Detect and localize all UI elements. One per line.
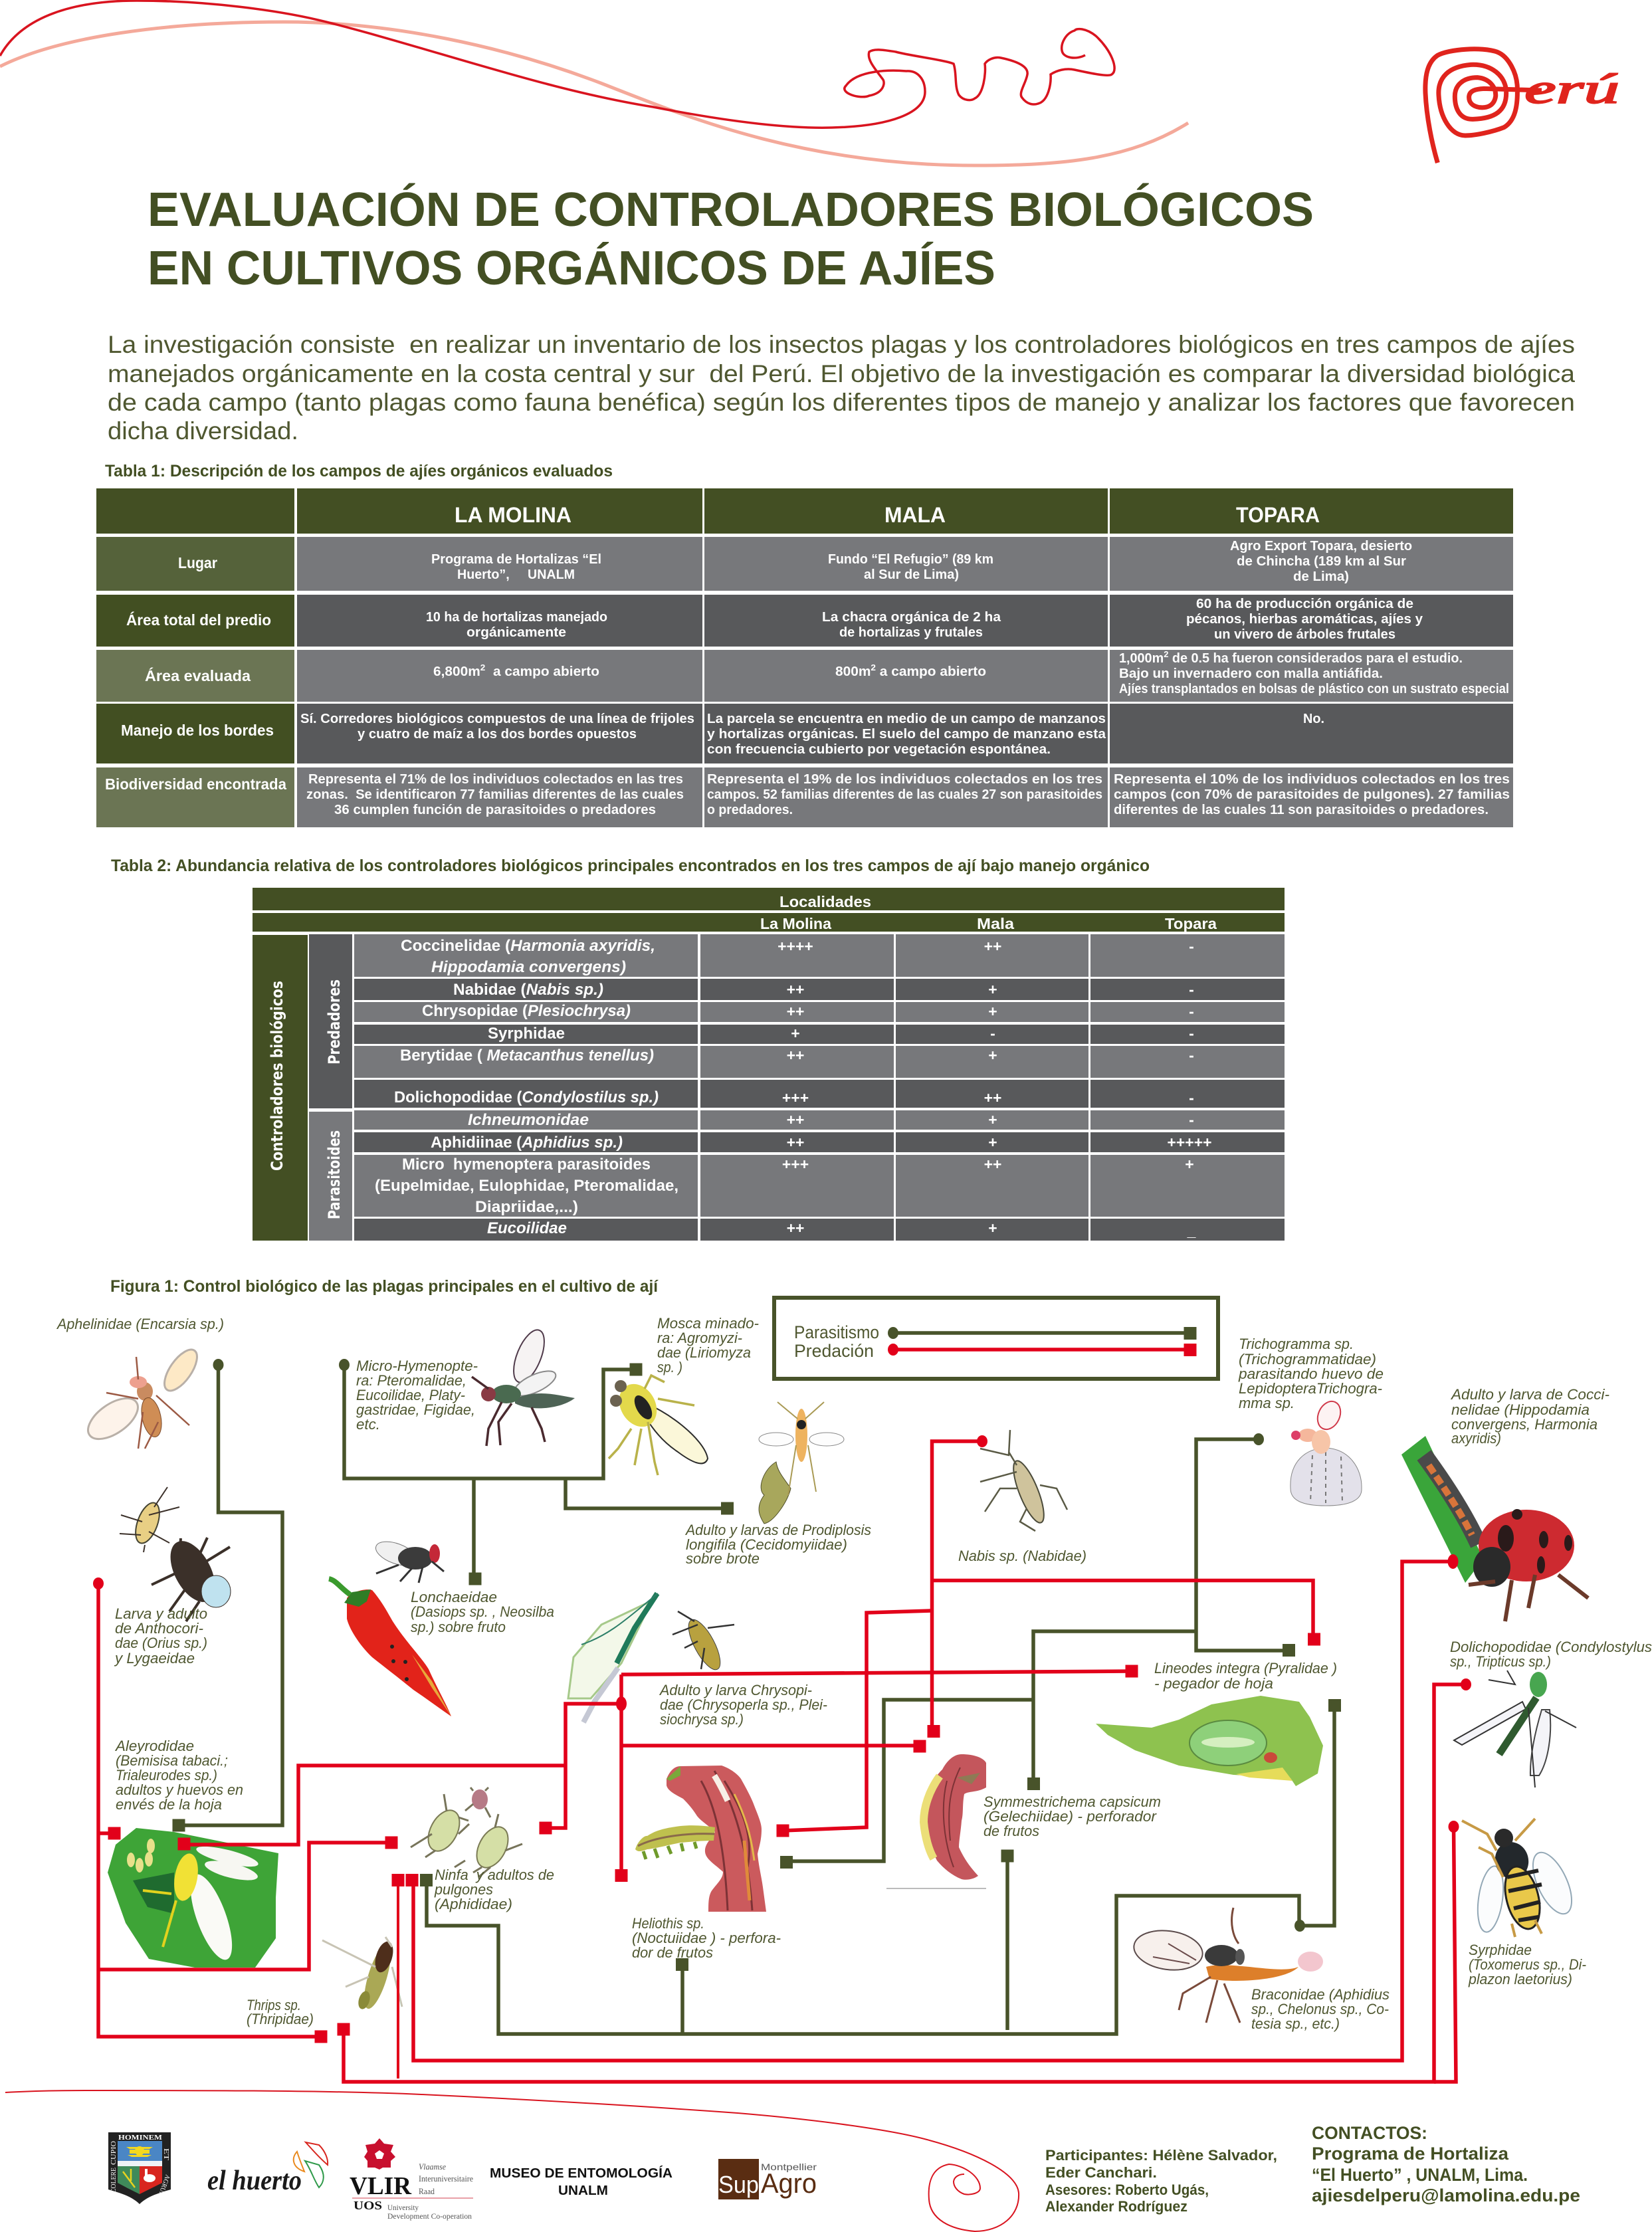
label: Trichogramma: [1238, 1336, 1384, 1411]
text: participantes: Eder Canchari.: [1045, 2164, 1157, 2181]
label: Lineodes: [1154, 1660, 1337, 1692]
side label: Predadores: [309, 934, 352, 1108]
table 1 row: Biodiversidad encontrada: Representa el 71% de los individuos colectados en las tres: [308, 772, 683, 787]
label: Aleyrodidae: Trialeurodes sp.): [116, 1767, 217, 1783]
icon: Symmestrichema fruit: [886, 1754, 986, 1888]
table 1 row: Area total: orgánicamente: [466, 625, 566, 640]
table 1 row: Area evaluada: 2: [480, 662, 485, 672]
text: participantes: Asesores: Roberto Ugás,: [1045, 2181, 1209, 2198]
table 1 row: Biodiversidad encontrada: Representa el 19% de los individuos colectados en los tres: [707, 772, 1102, 787]
table 2 taxon names: Syrphidae: [488, 1025, 565, 1043]
connector: Micro-Hymenoptera to hosts: [339, 1359, 734, 1585]
intro text: de cada campo (tanto plagas como fauna benéfica) según los diferentes tipos de manejo y analizar los factores que favorecen: [108, 389, 1575, 416]
label: Micro-Hymenoptera: etc.: [356, 1416, 380, 1433]
intro text: [108, 331, 1575, 445]
logo: university crest: CUPIO: [110, 2141, 118, 2165]
label: Aleyrodidae: (Bemisisa tabaci.;: [116, 1752, 228, 1769]
icon: Aphelinidae wasp: [81, 1344, 203, 1449]
label: Braconidae: tesia sp., etc.): [1251, 2015, 1340, 2032]
table 2 abundance values: [777, 938, 1212, 1239]
table 1 row: Area evaluada: 6,800m: [433, 664, 478, 679]
icon: wasp Micro-Hymenoptera: [472, 1326, 575, 1446]
table 1 row: Area evaluada: de 0.5 ha fueron considerados para el estudio.: [1168, 651, 1463, 666]
table 1 row: Biodiversidad encontrada: Biodiversidad encontrada: [105, 775, 286, 793]
connector: Aphelinidae to Aleyrodidae: [173, 1359, 282, 1831]
table 2: [253, 888, 1285, 1241]
table 1 row: Area total: Área total del predio: [126, 611, 271, 629]
table 1 row: Biodiversidad encontrada: zonas. Se identificaron 77 familias diferentes de las cuales: [306, 787, 684, 802]
table 2 taxon names: Micro hymenoptera parasitoides: [402, 1156, 651, 1173]
table 2 abundance values: ++: [787, 1047, 804, 1064]
legend: Parasitismo: [794, 1322, 879, 1342]
table 2 abundance values: ++: [984, 938, 1001, 955]
label: Prodiplosis: sobre brote: [686, 1550, 760, 1567]
label: Mosca minadora: Mosca minado-: [657, 1315, 759, 1332]
table 2 taxon names: Eucoilidae: [487, 1219, 567, 1237]
logo: VLIR UOS: UOS: [354, 2199, 382, 2212]
label: Trichogramma: (Trichogrammatidae): [1239, 1351, 1376, 1368]
side label: Parasitoides: [309, 1112, 352, 1241]
icon: Thrips: [322, 1937, 402, 2011]
table 2 header: Topara: [1165, 915, 1217, 932]
logo: VLIR UOS: VLIR: [350, 2172, 412, 2200]
table 1 row: Lugar: Agro Export Topara, desierto: [1230, 539, 1412, 554]
table 1 header row: [96, 488, 1513, 534]
label: Trichogramma: parasitando huevo de: [1238, 1366, 1384, 1382]
label: Dolichopodidae: Dolichopodidae (Condylostylus: [1450, 1639, 1652, 1655]
label: Micro-Hymenoptera: [356, 1358, 478, 1433]
side label: Parasitoides: Parasitoides: [325, 1130, 344, 1219]
logo: el huerto: [207, 2142, 328, 2196]
label: Micro-Hymenoptera: ra: Pteromalidae,: [356, 1372, 466, 1389]
table 1 row: Biodiversidad encontrada: o predadores.: [707, 803, 793, 817]
text: contactos: ajiesdelperu@lamolina.edu.pe: [1312, 2185, 1580, 2205]
label: Thrips: Thrips sp.: [247, 1997, 301, 2013]
icon: Braconid parasitoid on aphid: [1131, 1908, 1323, 2023]
table 1 row: Area evaluada: Área evaluada: [145, 666, 251, 684]
label: Lonchaeidae: sp.) sobre fruto: [411, 1619, 506, 1635]
table 2 abundance values: +: [1185, 1156, 1194, 1173]
table 1 row: Area total: [96, 595, 1513, 647]
label: Aphididae: (Aphididae): [435, 1896, 512, 1912]
table 2 abundance values: +++: [782, 1089, 809, 1106]
logo: SupAgro: Sup: [718, 2171, 759, 2198]
table 1 header row: TOPARA: [1236, 503, 1320, 527]
table 2 taxon names: Hippodamia convergens): [431, 958, 626, 976]
text: contactos: Programa de Hortaliza: [1312, 2144, 1509, 2164]
table 2 taxon names: Chrysopidae (Plesiochrysa): [422, 1002, 631, 1020]
connector: Coccinelidae to prey: [405, 1554, 1458, 2061]
table 2 abundance values: +: [988, 1003, 997, 1020]
header ornament curves: [0, 1, 1188, 165]
label: Micro-Hymenoptera: Eucoilidae, Platy-: [356, 1387, 465, 1403]
table 2 abundance values: -: [1189, 938, 1194, 955]
table 1 header row: LA MOLINA: [455, 503, 571, 527]
table 1 row: Area evaluada: Bajo un invernadero con malla antiáfida.: [1119, 666, 1383, 681]
table 1 row: Manejo de los bordes: Manejo de los bordes: [121, 722, 274, 739]
label: Coccinelidae: convergens, Harmonia: [1451, 1416, 1598, 1433]
icon: aphids: [411, 1787, 522, 1877]
label: Heliothis: Heliothis sp.: [632, 1915, 704, 1932]
logo: university crest: AGRUM: [156, 2174, 171, 2199]
text: contactos: “El Huerto” , UNALM, Lima.: [1312, 2165, 1528, 2185]
table 2 abundance values: -: [1189, 1003, 1194, 1020]
legend: Predación: [794, 1341, 874, 1361]
label: Symmestrichema: Symmestrichema capsicum: [983, 1793, 1161, 1810]
table 2 abundance values: +++++: [1167, 1134, 1212, 1151]
table 1 row: Area total: 10 ha de hortalizas manejado: [426, 610, 607, 625]
label: Syrphidae: plazon laetorius): [1468, 1971, 1572, 1987]
label: Trichogramma: Trichogramma sp.: [1239, 1336, 1354, 1352]
label: Anthocoridae: [114, 1605, 207, 1667]
label: Coccinelidae: axyridis): [1451, 1430, 1501, 1447]
logo: el huerto: el huerto: [207, 2166, 302, 2196]
table 2 taxon names: Diapriidae,...): [475, 1198, 578, 1216]
label: Aleyrodidae: [114, 1738, 243, 1813]
table 1 row: Manejo de los bordes: Sí. Corredores biológicos compuestos de una línea de frijoles: [300, 712, 694, 726]
table 1 row: Area evaluada: a campo abierto: [876, 664, 986, 679]
logo: Perú: erú: [1524, 65, 1619, 112]
table 1 row: Biodiversidad encontrada: Representa el 10% de los individuos colectados en los tres: [1114, 772, 1510, 787]
logo: university crest: COLERE: [110, 2168, 118, 2193]
connector: Orius to prey: [93, 1577, 397, 2043]
logo: SupAgro: [718, 2159, 817, 2199]
logo: SupAgro: Agro: [761, 2168, 817, 2199]
label: Symmestrichema: de frutos: [983, 1823, 1039, 1839]
side label: Controladores biológicos: [253, 935, 308, 1241]
connector: Chrysopidae to prey: [178, 1665, 1138, 1882]
label: Aphididae: Ninfa y adultos de: [435, 1867, 554, 1883]
title: EN CULTIVOS ORGÁNICOS DE AJÍES: [148, 242, 995, 295]
table 2 header: La Molina: [760, 915, 831, 932]
table 2 abundance values: +: [988, 1219, 997, 1237]
table 1 row: Area total: de hortalizas y frutales: [839, 625, 983, 640]
connector: Nabis to prey: [776, 1435, 1320, 1837]
table 2 abundance values: -: [990, 1025, 995, 1042]
icon: Orius larva: [120, 1487, 179, 1552]
logo: university crest: ET: [162, 2148, 169, 2160]
icon: Prodiplosis midge and shoot: [759, 1402, 844, 1524]
table 1 row: Manejo de los bordes: y cuatro de maíz a los dos bordes opuestos: [358, 727, 637, 742]
table 2 abundance values: -: [1189, 1047, 1194, 1064]
label: Braconidae: Braconidae (Aphidius: [1251, 1986, 1390, 2003]
table 1 row: Biodiversidad encontrada: campos. 52 familias diferentes de las cuales 27 son parasitoides: [707, 787, 1102, 802]
logo: SupAgro: Montpellier: [761, 2162, 817, 2172]
label: Anthocoridae: Larva y adulto: [115, 1605, 207, 1622]
logo: Museo de Entomología: UNALM: [558, 2183, 608, 2198]
table 2 abundance values: -: [1189, 1025, 1194, 1042]
label: Coccinelidae: nelidae (Hippodamia: [1451, 1401, 1590, 1418]
table 2 taxon names: Nabidae (Nabis sp.): [453, 981, 603, 999]
connector: link to aphids: [392, 1874, 404, 2079]
logo: university crest: HOMINEM: [118, 2134, 163, 2142]
connector: Dolichopodidae to prey: [338, 1678, 1471, 2082]
logo: Perú: [1425, 49, 1619, 163]
table 1 row: Area total: un vivero de árboles frutales: [1214, 627, 1395, 642]
table 1 row: Manejo de los bordes: La parcela se encuentra en medio de un campo de manzanos: [707, 712, 1106, 726]
text: contactos: [1312, 2123, 1580, 2205]
label: Prodiplosis: [684, 1522, 871, 1567]
table 1 row: Area total: La chacra orgánica de 2 ha: [822, 610, 1001, 625]
label: Heliothis: [632, 1915, 781, 1961]
table 1 row: Lugar: Fundo “El Refugio” (89 km: [828, 552, 993, 567]
label: Coccinelidae: Adulto y larva de Cocci-: [1450, 1386, 1609, 1403]
logo: university crest: [108, 2132, 171, 2204]
label: Trichogramma: LepidopteraTrichogra-: [1239, 1380, 1382, 1397]
table 2 abundance values: ++: [984, 1156, 1001, 1173]
table 2 abundance values: ++: [787, 1219, 804, 1237]
heading: figura 1: Figura 1: Control biológico de las plagas principales en el cultivo de ají: [110, 1277, 659, 1296]
label: Braconidae: sp., Chelonus sp., Co-: [1251, 2001, 1389, 2017]
connector: Braconidae to hosts: [420, 1699, 1341, 2034]
label: Thrips: [247, 1997, 314, 2027]
table 1 row: Lugar: Huerto”, UNALM: [457, 567, 575, 582]
table 1 row: Manejo de los bordes: No.: [1303, 712, 1324, 726]
table 2 header: Localidades: [779, 893, 871, 910]
table 2 taxon names: Berytidae ( Metacanthus tenellus): [400, 1047, 654, 1065]
table 1 row: Biodiversidad encontrada: campos (con 70% de parasitoides de pulgones). 27 familias: [1114, 787, 1510, 802]
icon: Dolichopodid fly: [1454, 1671, 1576, 1787]
text: contactos: CONTACTOS:: [1312, 2123, 1427, 2143]
table 1 row: Area total: 60 ha de producción orgánica de: [1196, 597, 1413, 611]
table 1 row: Area evaluada: 800m: [835, 664, 869, 679]
heading: tabla 1: Tabla 1: Descripción de los campos de ajíes orgánicos evaluados: [105, 462, 613, 480]
logo: VLIR UOS: [350, 2138, 473, 2221]
table 1 row: Area total: pécanos, hierbas aromáticas, ajíes y: [1186, 612, 1423, 627]
label: Chrysopidae: siochrysa sp.): [660, 1711, 744, 1728]
table 2 abundance values: ++: [787, 1134, 804, 1151]
icon: ladybird and larva on leaf: [1401, 1436, 1588, 1621]
table 2 abundance values: +: [988, 981, 997, 998]
table 1 header row: MALA: [884, 503, 946, 527]
heading: tabla 2: Tabla 2: Abundancia relativa de los controladores biológicos principales encontrados en los tres campos de ají bajo manejo orgánico: [111, 857, 1150, 875]
label: Thrips: (Thripidae): [247, 2011, 314, 2027]
connector: Trichogramma to Lepidoptera hosts: [780, 1433, 1295, 1869]
table 1 row: Area evaluada: a campo abierto: [485, 664, 599, 679]
text: participantes: Participantes: Hélène Salvador,: [1045, 2147, 1277, 2164]
table 2 abundance values: +: [988, 1047, 997, 1064]
label: Mosca minadora: [657, 1315, 759, 1375]
table 1 row: Manejo de los bordes: con frecuencia cubierto por vegetación espontánea.: [707, 742, 1051, 757]
table 2 abundance values: _: [1187, 1222, 1196, 1239]
text: participantes: Alexander Rodríguez: [1045, 2198, 1187, 2215]
label: Lineodes: - pegador de hoja: [1154, 1675, 1273, 1692]
label: Lonchaeidae: (Dasiops sp. , Neosilba: [411, 1603, 554, 1620]
label: Aphelinidae: Aphelinidae (Encarsia sp.): [56, 1316, 224, 1332]
table 1 row: Lugar: Programa de Hortalizas “El: [431, 552, 601, 567]
text: participantes: [1045, 2147, 1277, 2215]
label: Anthocoridae: y Lygaeidae: [114, 1650, 195, 1667]
connector lines: parasitism (green): [173, 1359, 1341, 2034]
logo: VLIR UOS: Vlaamse: [419, 2162, 446, 2172]
table 2 taxon names: (Eupelmidae, Eulophidae, Pteromalidae,: [375, 1177, 678, 1195]
intro text: dicha diversidad.: [108, 417, 298, 445]
table 2 abundance values: ++: [984, 1089, 1001, 1106]
table 2 header: Mala: [977, 915, 1014, 932]
table 1 row: Lugar: [96, 537, 1513, 591]
icon: Heliothis fruit and caterpillar: [635, 1766, 766, 1912]
label: Coccinelidae: [1450, 1386, 1609, 1447]
label: Mosca minadora: dae (Liriomyza: [657, 1344, 751, 1361]
table 1 row: Manejo de los bordes: y hortalizas orgánicas. El suelo del campo de manzano esta: [707, 727, 1106, 742]
label: Aphididae: [434, 1867, 554, 1912]
label: Chrysopidae: Adulto y larva Chrysopi-: [659, 1682, 812, 1698]
icon: Nabis bug: [980, 1430, 1067, 1531]
table 2 abundance values: +++: [782, 1156, 809, 1173]
icon: Anthocoridae bug: [152, 1534, 231, 1621]
label: Prodiplosis: Adulto y larvas de Prodiplosis: [684, 1522, 871, 1538]
table 2 abundance values: -: [1189, 1089, 1194, 1106]
table 2 taxon names: Ichneumonidae: [468, 1111, 589, 1129]
label: Heliothis: (Noctuiidae ) - perfora-: [632, 1930, 781, 1946]
connector: Syrphidae to prey: [1434, 1821, 1459, 2082]
table 1 row: Area evaluada: [96, 649, 1513, 702]
footer ornament curve: [5, 2090, 1019, 2231]
label: Trichogramma: mma sp.: [1239, 1395, 1294, 1411]
table 2 abundance values: ++++: [777, 938, 813, 955]
table 2 abundance values: +: [988, 1111, 997, 1128]
table 1: [96, 488, 1513, 827]
label: Micro-Hymenoptera: Micro-Hymenopte-: [356, 1358, 478, 1374]
label: Aleyrodidae: Aleyrodidae: [114, 1738, 194, 1754]
title: EVALUACIÓN DE CONTROLADORES BIOLÓGICOS: [148, 183, 1314, 237]
label: Symmestrichema: [983, 1793, 1161, 1839]
table 1 row: Lugar: al Sur de Lima): [864, 567, 959, 582]
table 2 abundance values: ++: [787, 1111, 804, 1128]
table 1 row: Area evaluada: 1,000m: [1119, 651, 1164, 666]
label: Mosca minadora: ra: Agromyzi-: [657, 1330, 742, 1346]
label: Anthocoridae: de Anthocori-: [115, 1620, 203, 1637]
label: Aphididae: pulgones: [434, 1881, 493, 1898]
icon: Lineodes leaf: [1096, 1696, 1323, 1786]
logo: VLIR UOS: Interuniversitaire: [419, 2174, 473, 2183]
table 1 row: Biodiversidad encontrada: 36 cumplen función de parasitoides o predadores: [334, 803, 656, 817]
table 1 row: Biodiversidad encontrada: [96, 767, 1513, 827]
side label: Predadores: Predadores: [325, 979, 344, 1065]
label: Syrphidae: [1468, 1942, 1586, 1987]
label: Dolichopodidae: sp., Tripticus sp.): [1450, 1653, 1551, 1670]
table 1 row: Lugar: de Lima): [1293, 569, 1349, 584]
table 2 taxon names: [375, 937, 678, 1237]
label: Syrphidae: Syrphidae: [1469, 1942, 1532, 1958]
icon: whitefly on leaf: [108, 1828, 278, 1968]
table 2 taxon names: Aphidiinae (Aphidius sp.): [431, 1134, 623, 1152]
title: [148, 183, 1314, 295]
table 2 abundance values: ++: [787, 981, 804, 998]
label: Anthocoridae: dae (Orius sp.): [115, 1635, 207, 1651]
icon: lacewing larva: [672, 1611, 734, 1674]
table 1 row: Area evaluada: 2: [1164, 649, 1168, 659]
label: Symmestrichema: (Gelechiidae) - perforador: [983, 1808, 1158, 1825]
icon: Liriomyza fly: [609, 1375, 708, 1475]
label: Lonchaeidae: [411, 1589, 554, 1635]
icon: lacewing adult: [568, 1593, 658, 1722]
label: Dolichopodidae: [1450, 1639, 1652, 1670]
illustrations layer: [81, 1326, 1588, 2023]
label: Chrysopidae: [659, 1682, 827, 1728]
table 2 abundance values: -: [1189, 1111, 1194, 1128]
table 2 abundance values: ++: [787, 1003, 804, 1020]
table 2 taxon names: Coccinelidae (Harmonia axyridis,: [401, 937, 655, 955]
icon: Syrphid fly: [1462, 1819, 1580, 1937]
logo: VLIR UOS: University: [387, 2203, 419, 2212]
table 1 row: Lugar: de Chincha (189 km al Sur: [1237, 554, 1406, 569]
label: Heliothis: dor de frutos: [632, 1944, 713, 1961]
icon: Trichogramma on egg: [1291, 1397, 1362, 1506]
label: Braconidae: [1251, 1986, 1390, 2032]
label: Chrysopidae: dae (Chrysoperla sp., Plei-: [660, 1696, 827, 1713]
logo: Museo de Entomología: MUSEO DE ENTOMOLOGÍA: [490, 2166, 672, 2181]
table 2 abundance values: +: [791, 1025, 800, 1042]
table 2 abundance values: +: [988, 1134, 997, 1151]
table 2 taxon names: Dolichopodidae (Condylostilus sp.): [394, 1088, 659, 1106]
label: Prodiplosis: longifila (Cecidomyiidae): [686, 1536, 847, 1553]
intro text: manejados orgánicamente en la costa central y sur del Perú. El objetivo de la investigación es comparar la diversidad biológica: [108, 360, 1575, 387]
table 2 abundance values: -: [1189, 981, 1194, 998]
intro text: La investigación consiste en realizar un inventario de los insectos plagas y los controladores biológicos en tres campos de ajíes: [108, 331, 1575, 358]
label: Lonchaeidae: Lonchaeidae: [411, 1589, 497, 1605]
table 1 row: Area evaluada: 2: [871, 662, 876, 672]
table 1 row: Manejo de los bordes: [96, 704, 1513, 763]
table 1 row: Biodiversidad encontrada: diferentes de las cuales 11 son parasitoides o predadores.: [1114, 803, 1489, 817]
table 1 row: Area evaluada: Ajíes transplantados en bolsas de plástico con un sustrato especial: [1119, 682, 1509, 696]
logo: VLIR UOS: Raad: [419, 2186, 435, 2196]
table 2 header: [253, 888, 1285, 932]
table 2 cell backgrounds: [354, 934, 1285, 1241]
icon: fly Lonchaeidae: [373, 1537, 444, 1583]
label: Aleyrodidae: envés de la hoja: [116, 1796, 222, 1813]
label: Nabis: Nabis sp. (Nabidae): [958, 1548, 1086, 1564]
label: Syrphidae: (Toxomerus sp., Di-: [1469, 1956, 1586, 1973]
legend: [774, 1298, 1218, 1379]
logo: VLIR UOS: Development Co-operation: [387, 2211, 472, 2221]
icon: chili pepper: [329, 1579, 451, 1716]
side label: Controladores biológicos: Controladores biológicos: [268, 981, 286, 1171]
label: Mosca minadora: sp. ): [657, 1359, 682, 1375]
logo: Museo de Entomología: [490, 2166, 672, 2198]
label: Lineodes: Lineodes integra (Pyralidae ): [1154, 1660, 1337, 1676]
label: Aleyrodidae: adultos y huevos en: [116, 1781, 243, 1798]
label: Micro-Hymenoptera: gastridae, Figidae,: [356, 1401, 475, 1418]
connector lines: predation (red): [93, 1435, 1471, 2082]
table 1 row: Lugar: Lugar: [178, 554, 217, 571]
